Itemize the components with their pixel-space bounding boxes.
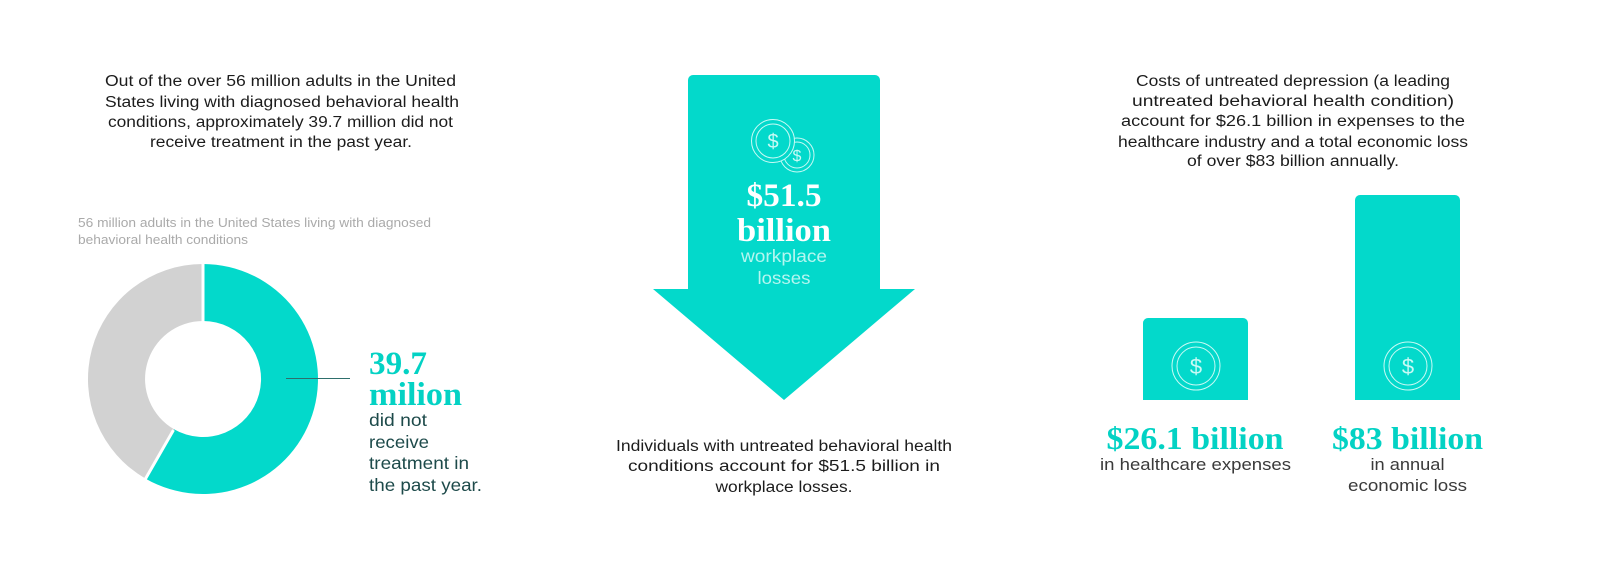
- bar: healthcare expenses: [1143, 318, 1248, 400]
- callout: 39.7 million: receive: [369, 432, 429, 452]
- leader line: [286, 378, 350, 380]
- icon: dollar coin: $: [1190, 354, 1202, 379]
- icon: coins: [752, 120, 814, 172]
- callout: 39.7 million: did not: [369, 410, 427, 430]
- stat: 26.1 billion: [1100, 420, 1291, 474]
- text block: workplace losses: [616, 438, 952, 496]
- panel: depression costs: [1100, 73, 1483, 495]
- icon: coins: $: [793, 148, 802, 165]
- icon: dollar coin: [1384, 342, 1432, 390]
- stat: 51.5 billion: $51.5: [746, 178, 822, 214]
- stat: 83 billion: $83 billion: [1332, 420, 1483, 456]
- text block: workplace losses: workplace losses.: [714, 479, 852, 496]
- icon: coins: $: [767, 131, 779, 153]
- callout: 39.7 million: treatment in: [369, 453, 469, 473]
- stat: 83 billion: in annual: [1370, 455, 1444, 474]
- stat: 51.5 billion: losses: [758, 268, 811, 288]
- text block: depression costs: untreated behavioral health condition): [1132, 93, 1454, 110]
- chart caption: behavioral health conditions: [78, 233, 248, 247]
- donut chart: [88, 262, 318, 494]
- stat: 26.1 billion: $26.1 billion: [1106, 420, 1284, 456]
- bar: economic loss: [1355, 195, 1460, 400]
- arrow: [653, 75, 915, 400]
- panel: untreated adults: [78, 73, 482, 495]
- chart caption: [78, 216, 431, 247]
- text block: adults intro: States living with diagnosed behavioral health: [105, 94, 459, 111]
- text block: adults intro: Out of the over 56 million adults in the United: [105, 73, 456, 90]
- stat: 83 billion: economic loss: [1348, 476, 1467, 495]
- text block: depression costs: Costs of untreated depression (a leading: [1136, 73, 1450, 90]
- callout: 39.7 million: 39.7: [369, 346, 427, 382]
- stat: 51.5 billion: workplace: [740, 246, 827, 266]
- stat: 26.1 billion: in healthcare expenses: [1100, 455, 1291, 474]
- text block: adults intro: receive treatment in the past year.: [150, 134, 412, 151]
- text block: adults intro: [105, 73, 459, 151]
- chart caption: 56 million adults in the United States living with diagnosed: [78, 216, 431, 230]
- panel: workplace losses: [616, 75, 952, 496]
- stat: 51.5 billion: billion: [737, 213, 831, 249]
- callout: 39.7 million: the past year.: [369, 475, 482, 495]
- text block: workplace losses: conditions account for $51.5 billion in: [628, 458, 940, 475]
- text block: depression costs: healthcare industry and a total economic loss: [1118, 134, 1468, 151]
- text block: depression costs: [1118, 73, 1468, 170]
- callout: 39.7 million: milion: [369, 377, 462, 413]
- text block: workplace losses: Individuals with untreated behavioral health: [616, 438, 952, 455]
- text block: depression costs: account for $26.1 billion in expenses to the: [1121, 113, 1465, 130]
- stat: 83 billion: [1332, 420, 1483, 495]
- text block: depression costs: of over $83 billion annually.: [1187, 153, 1399, 170]
- callout: 39.7 million: [369, 346, 482, 495]
- text block: adults intro: conditions, approximately 39.7 million did not: [108, 114, 454, 131]
- icon: dollar coin: $: [1402, 354, 1414, 379]
- stat: 51.5 billion: [737, 178, 831, 288]
- icon: dollar coin: [1172, 342, 1220, 390]
